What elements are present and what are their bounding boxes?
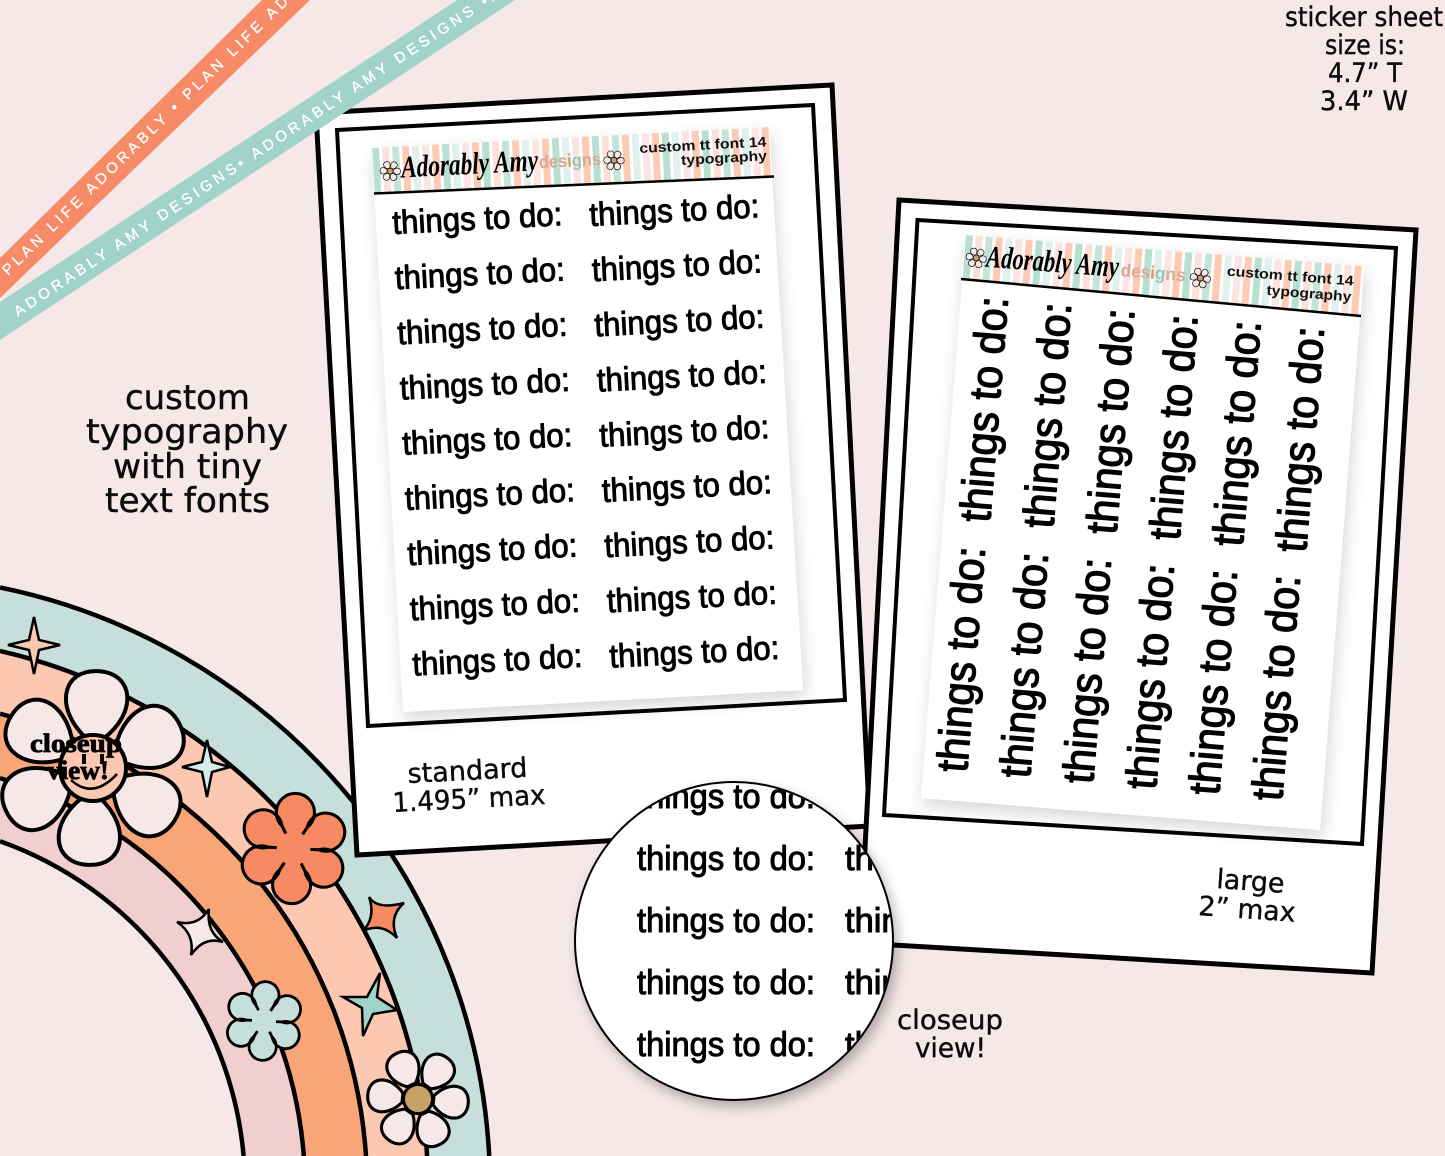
sticker rows: standard left column: things to do: <box>406 526 578 572</box>
label: standard size: standard <box>407 753 528 790</box>
icon: big smiley flower with caption <box>0 670 193 866</box>
label: standard size <box>392 753 546 819</box>
sheet header: large: custom tt font 14 <box>1226 263 1354 289</box>
closeup magnifier circle: things to do: <box>637 902 815 940</box>
label: large size: 2” max <box>1198 891 1296 929</box>
sticker rows: standard left column: things to do: <box>404 471 576 517</box>
heading: custom typography: typography <box>86 412 288 452</box>
sticker columns: large top row: things to do: <box>1078 307 1144 536</box>
closeup magnifier circle: things to do: <box>637 840 815 878</box>
sticker rows: standard left column: things to do: <box>401 416 573 462</box>
sticker columns: large top row: things to do: <box>1204 319 1271 548</box>
heading: custom typography <box>86 378 288 521</box>
sheet header: large <box>961 235 1364 316</box>
sheet header: standard <box>372 127 774 194</box>
heading: custom typography: custom <box>125 378 250 418</box>
sticker columns: large bottom row: things to do: <box>1243 573 1310 802</box>
sticker columns: large top row <box>951 295 1334 554</box>
rainbow <box>0 588 489 1156</box>
sticker sheet: large <box>921 235 1364 830</box>
heading: custom typography: text fonts <box>105 481 270 521</box>
sticker columns: large bottom row: things to do: <box>991 550 1058 780</box>
sticker columns: large top row: things to do: <box>1141 313 1208 542</box>
closeup magnifier circle: things to do: <box>637 778 815 816</box>
icon: big smiley flower with caption: view! <box>47 756 109 785</box>
sticker columns: large bottom row: things to do: <box>1180 567 1247 797</box>
sticker rows: standard left column: things to do: <box>399 361 571 407</box>
sticker columns: large bottom row: things to do: <box>928 545 995 774</box>
sticker rows: standard left column: things to do: <box>409 582 581 627</box>
sticker rows: standard right column: things to do: <box>591 242 763 288</box>
ribbon: coral plan life adorably: PLAN LIFE ADORABLY • PLAN LIFE AD <box>0 0 292 279</box>
sticker rows: standard left column: things to do: <box>396 306 568 351</box>
sticker rows: standard right column: things to do: <box>601 463 773 509</box>
sticker rows: standard right column: things to do: <box>603 518 775 564</box>
label: large size <box>1198 864 1296 929</box>
sheet header: standard: Adorably Amy <box>399 142 539 185</box>
sticker columns: large bottom row <box>928 545 1310 802</box>
sticker rows: standard right column: things to do: <box>596 353 768 399</box>
label: closeup view: closeup <box>897 1005 1003 1036</box>
sticker columns: large top row: things to do: <box>1267 325 1334 554</box>
note: sticker sheet size: 4.7” T <box>1328 58 1402 89</box>
label: closeup view: view! <box>915 1033 986 1064</box>
heading: custom typography: with tiny <box>113 447 262 487</box>
panel: large sticker card <box>860 200 1416 973</box>
icon: coral sparkle <box>363 897 404 938</box>
sticker rows: standard left column: things to do: <box>394 250 566 296</box>
sticker rows: standard right column: things to do: <box>608 629 780 675</box>
closeup magnifier circle: things <box>845 1026 937 1064</box>
sticker rows: standard left column: things to do: <box>411 637 583 683</box>
icon: mint sparkle <box>182 740 230 797</box>
sticker rows: standard right column <box>588 187 780 675</box>
closeup magnifier circle: things <box>845 964 937 1002</box>
icon: big smiley flower with caption: closeup <box>30 729 122 758</box>
icon: coral flower <box>240 791 347 906</box>
panel: standard sticker card <box>316 85 870 855</box>
sticker rows: standard right column: things to do: <box>606 574 778 619</box>
sheet header: standard: custom tt font 14 <box>639 133 767 156</box>
label: standard size: 1.495” max <box>392 780 546 819</box>
sticker rows: standard left column: things to do: <box>391 195 563 241</box>
icon: peach sparkle <box>8 617 60 674</box>
sticker rows: standard right column: things to do: <box>593 298 765 343</box>
sheet header: large: Adorably Amy <box>984 239 1121 284</box>
icon: mint flower <box>226 980 302 1062</box>
sticker columns: large top row: things to do: <box>951 295 1018 524</box>
label: large size: large <box>1216 864 1286 900</box>
closeup magnifier circle: things <box>845 840 937 878</box>
sheet header: standard: typography <box>681 147 768 168</box>
icon: white sparkle <box>177 909 223 955</box>
sticker columns: large top row: things to do: <box>1014 301 1081 530</box>
sheet header: standard: designs <box>538 149 601 172</box>
icon: teal sparkle <box>343 973 397 1036</box>
sticker rows: standard right column: things to do: <box>588 187 760 233</box>
icon: daisy with gold centre <box>366 1047 470 1151</box>
sticker rows: standard left column <box>391 195 583 683</box>
closeup magnifier circle: things to do: <box>637 964 815 1002</box>
sticker sheet: standard <box>372 127 803 712</box>
sticker columns: large bottom row: things to do: <box>1054 556 1121 785</box>
note: sticker sheet size <box>1285 2 1443 117</box>
closeup magnifier circle: things <box>845 902 937 940</box>
closeup magnifier circle: things to do: <box>637 1026 815 1064</box>
sheet header: large: designs <box>1120 260 1186 285</box>
closeup magnifier circle <box>575 778 937 1100</box>
sheet header: large: typography <box>1266 282 1352 304</box>
note: sticker sheet size: size is: <box>1325 30 1405 61</box>
note: sticker sheet size: 3.4” W <box>1320 86 1408 117</box>
label: closeup view <box>897 1005 1003 1064</box>
sticker rows: standard right column: things to do: <box>598 408 770 454</box>
sticker columns: large bottom row: things to do: <box>1117 562 1184 791</box>
